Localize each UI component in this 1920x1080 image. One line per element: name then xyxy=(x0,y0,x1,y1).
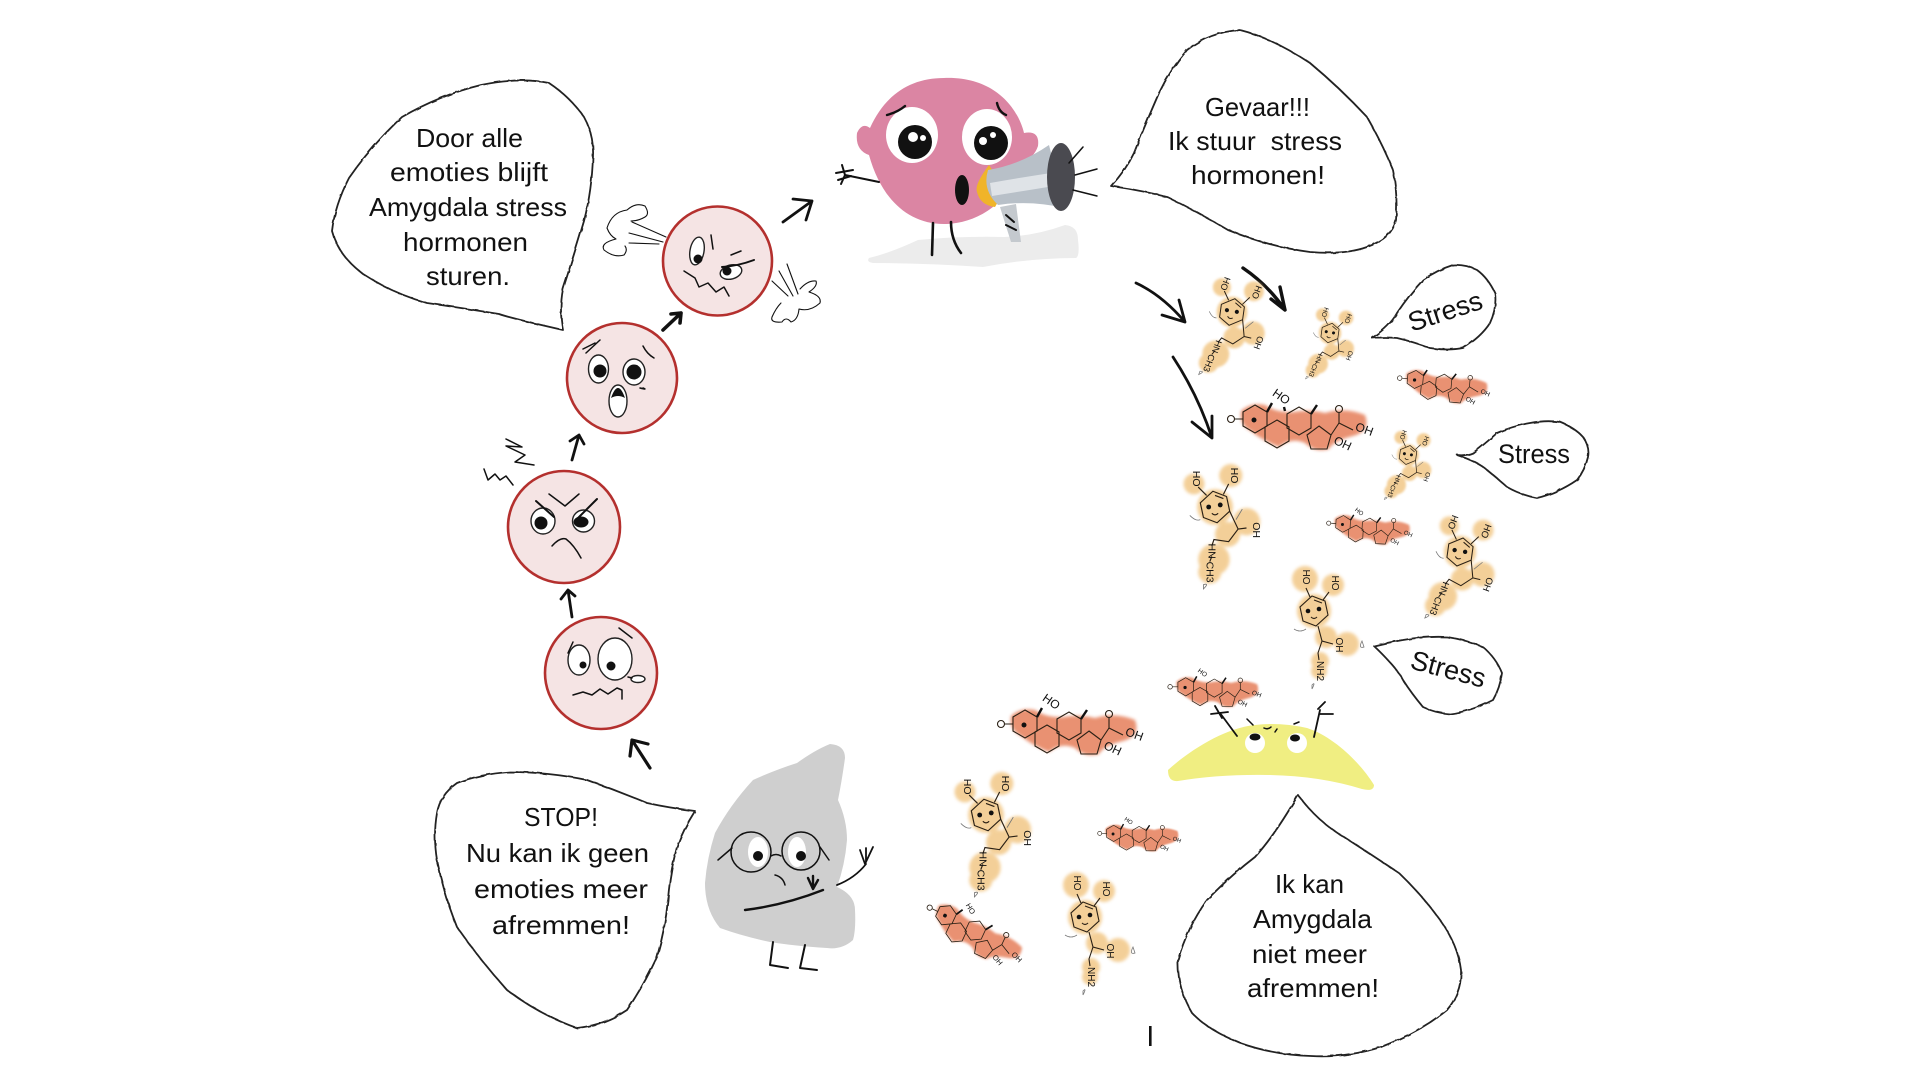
molecule: adrenaline 4: HO xyxy=(1190,471,1202,487)
molecule: adrenaline 2: HO xyxy=(1343,312,1352,324)
speech bubble: Stress middle xyxy=(1457,421,1588,498)
molecule: adrenaline 7: CH3 xyxy=(975,870,987,891)
emotion face: sad with tear xyxy=(545,617,657,729)
speech bubble: Ik kan: afremmen! xyxy=(1247,973,1379,1003)
molecule: noradrenaline 8 xyxy=(1063,872,1135,995)
molecule: cortisol 6: OH xyxy=(1172,836,1182,845)
speech bubble: Stress top: Stress xyxy=(1404,285,1486,338)
molecule: cortisol 7: HO xyxy=(964,902,977,916)
molecule: cortisol 5 xyxy=(998,691,1145,759)
megaphone xyxy=(976,165,1005,207)
speech bubble: Door alle emoties: emoties blijft xyxy=(390,157,549,187)
speech bubble: STOP: Nu kan ik geen xyxy=(466,838,649,868)
molecule: adrenaline 5: HO xyxy=(1445,513,1460,531)
molecule: adrenaline 1: HO xyxy=(1250,284,1264,300)
molecule: adrenaline 5: CH3 xyxy=(1427,595,1443,616)
molecule: cortisol 3 xyxy=(1326,506,1414,548)
molecule: noradrenaline 6: HO xyxy=(1329,576,1340,591)
molecule: adrenaline 1 xyxy=(1183,268,1283,392)
molecule: adrenaline 5: HO xyxy=(1478,522,1493,540)
molecule: cortisol 1: OH xyxy=(1354,420,1375,439)
molecule: cortisol 7 xyxy=(917,885,1036,976)
speech bubble: STOP: STOP! xyxy=(524,802,598,832)
emotion face: shocked angry with steam xyxy=(603,205,820,322)
molecule: adrenaline 7 xyxy=(954,772,1033,897)
character: yellow hypothalamus xyxy=(1168,702,1374,790)
speech bubble: Gevaar: Gevaar!!! xyxy=(1205,92,1310,122)
molecule: adrenaline 4: CH3 xyxy=(1204,562,1216,583)
molecule: noradrenaline 6: NH2 xyxy=(1314,661,1325,681)
molecule: cortisol 4 xyxy=(1168,668,1262,709)
molecule: cortisol 3: OH xyxy=(1402,530,1413,539)
molecule: noradrenaline 6: HO xyxy=(1300,570,1311,585)
speech bubble: STOP: emoties meer xyxy=(474,874,648,904)
arrow: face 1 to face 2 xyxy=(561,590,575,617)
character: grey hippocampus with glasses xyxy=(705,744,873,970)
molecule: adrenaline 1: HO xyxy=(1218,276,1232,292)
molecule: adrenaline 7: HN xyxy=(977,852,989,867)
arrow: hormones released down xyxy=(1173,357,1212,438)
molecule: cortisol 2 xyxy=(1396,368,1493,408)
speech bubble: Door alle emoties: Amygdala stress xyxy=(369,192,567,222)
cursor mark xyxy=(1149,1026,1152,1046)
molecule: adrenaline 7: OH xyxy=(1021,830,1033,846)
molecule: adrenaline 4: HN xyxy=(1206,544,1218,559)
molecule: adrenaline 3: HO xyxy=(1420,435,1430,446)
molecule: adrenaline 4: OH xyxy=(1250,522,1262,538)
character: amygdala pink with megaphone xyxy=(836,78,1097,267)
molecule: noradrenaline 6 xyxy=(1292,566,1364,689)
speech bubble: Ik kan xyxy=(1178,795,1461,1056)
arrow: hippocampus to face 1 xyxy=(630,740,650,768)
speech bubble: Stress lower: Stress xyxy=(1407,645,1489,694)
molecule: adrenaline 3: CH3 xyxy=(1385,484,1397,499)
molecule: adrenaline 7: HO xyxy=(961,779,973,795)
molecule: cortisol 5: OH xyxy=(1124,725,1145,744)
molecule: noradrenaline 8: HO xyxy=(1100,882,1111,897)
molecule: cortisol 5: HO xyxy=(1040,691,1063,713)
molecule: adrenaline 3: OH xyxy=(1421,471,1431,483)
arrow: face 3 to face 4 xyxy=(663,313,681,330)
molecule: cortisol 5: OH xyxy=(1102,738,1124,759)
molecule: cortisol 4: HO xyxy=(1196,668,1208,679)
molecule: cortisol 4: OH xyxy=(1251,690,1262,700)
arrow: face 2 to face 3 xyxy=(570,435,584,460)
speech bubble: STOP: afremmen! xyxy=(492,910,630,940)
arrow: hormones released right xyxy=(1136,283,1185,322)
emotion face: frightened xyxy=(567,323,677,433)
speech bubble: Ik kan: niet meer xyxy=(1252,939,1367,969)
molecule: cortisol 3: HO xyxy=(1353,507,1364,518)
molecule: adrenaline 4: HO xyxy=(1228,468,1240,483)
molecule: adrenaline 5: OH xyxy=(1480,576,1495,593)
molecule: cortisol 7: OH xyxy=(1010,950,1024,964)
molecule: noradrenaline 8: HO xyxy=(1071,876,1082,891)
ground shadow xyxy=(868,225,1079,267)
speech bubble: STOP xyxy=(435,772,695,1028)
molecule: cortisol 2: OH xyxy=(1479,388,1491,399)
molecule: cortisol 7: OH xyxy=(990,953,1005,967)
pink body xyxy=(857,78,1038,224)
arrow: face to amygdala xyxy=(783,199,812,222)
molecule: cortisol 1 xyxy=(1228,386,1375,454)
arrow: hormones released top xyxy=(1243,268,1285,310)
molecule: noradrenaline 6: OH xyxy=(1333,638,1344,652)
speech bubble: Door alle emoties: hormonen xyxy=(403,227,528,257)
speech bubble: Stress top xyxy=(1372,265,1495,350)
molecule: adrenaline 2: HO xyxy=(1319,306,1329,318)
molecule: adrenaline 4 xyxy=(1184,464,1262,589)
molecule: adrenaline 1: CH3 xyxy=(1201,353,1217,373)
molecule: adrenaline 2: CH3 xyxy=(1307,363,1318,378)
molecule: cortisol 6 xyxy=(1098,817,1182,853)
molecule: cortisol 6: HO xyxy=(1123,817,1134,827)
speech bubble: Stress middle: Stress xyxy=(1498,439,1570,469)
molecule: adrenaline 5 xyxy=(1408,506,1513,636)
speech bubble: Door alle emoties xyxy=(332,80,593,330)
molecule: adrenaline 1: OH xyxy=(1251,335,1266,351)
molecule: adrenaline 2: HN xyxy=(1313,353,1323,364)
speech bubble: Door alle emoties: sturen. xyxy=(426,261,510,291)
speech bubble: Door alle emoties: Door alle xyxy=(416,123,523,153)
molecule: cortisol 1: OH xyxy=(1332,433,1354,454)
molecule: adrenaline 5: HN xyxy=(1436,580,1451,597)
speech bubble: Gevaar: Ik stuur stress xyxy=(1168,126,1342,156)
molecule: adrenaline 3 xyxy=(1373,424,1443,511)
molecule: adrenaline 7: HO xyxy=(999,776,1011,791)
speech bubble: Ik kan: Ik kan xyxy=(1275,869,1344,899)
speech bubble: Gevaar: hormonen! xyxy=(1191,160,1325,190)
molecule: cortisol 2: OH xyxy=(1464,396,1476,407)
emotion face: angry with lightning marks xyxy=(484,439,620,583)
molecule: adrenaline 2: OH xyxy=(1344,349,1354,361)
speech bubble: Ik kan: Amygdala xyxy=(1253,904,1373,934)
speech bubble: Stress lower xyxy=(1374,637,1502,714)
speech bubble: Gevaar xyxy=(1111,30,1397,253)
molecule: cortisol 3: OH xyxy=(1389,538,1400,547)
molecule: noradrenaline 8: NH2 xyxy=(1085,967,1096,987)
molecule: adrenaline 3: HO xyxy=(1398,429,1408,440)
molecule: adrenaline 1: HN xyxy=(1210,339,1224,355)
molecule: adrenaline 2 xyxy=(1294,301,1366,391)
molecule: cortisol 4: OH xyxy=(1236,698,1248,709)
molecule: cortisol 6: OH xyxy=(1159,844,1169,853)
molecule: cortisol 1: HO xyxy=(1270,386,1293,408)
molecule: adrenaline 3: HN xyxy=(1392,474,1401,485)
molecule: noradrenaline 8: OH xyxy=(1104,944,1115,958)
